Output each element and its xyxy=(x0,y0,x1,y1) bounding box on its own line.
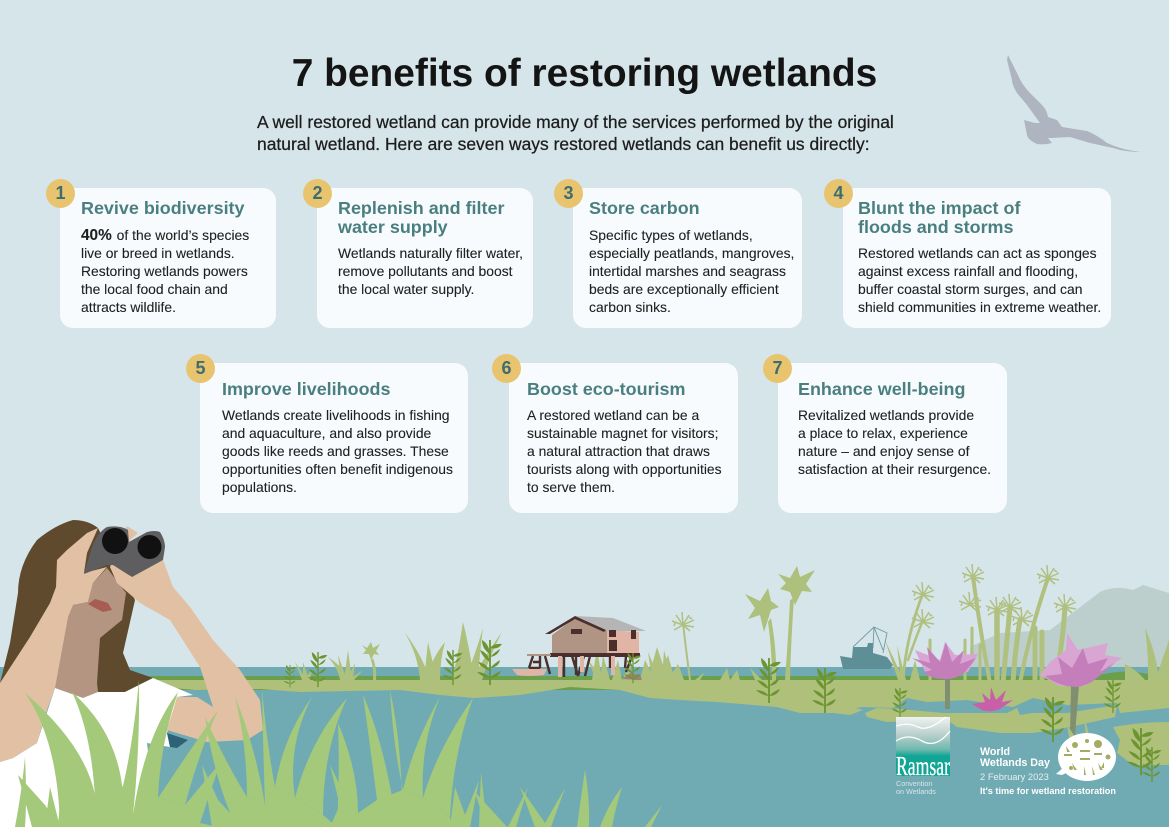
icon: flying bird xyxy=(1007,55,1141,152)
far arm and hand xyxy=(0,528,107,762)
text 1: the local food chain and xyxy=(81,281,228,297)
logo: World Wetlands Day: Wetlands Day xyxy=(980,757,1050,769)
badge 6 xyxy=(492,354,521,383)
lips xyxy=(88,599,112,612)
text 5: Wetlands create livelihoods in fishing xyxy=(222,407,450,423)
badge 2 xyxy=(303,179,332,208)
badge 3: 3 xyxy=(563,183,574,203)
text 3: Specific types of wetlands, xyxy=(589,227,753,243)
logo: World Wetlands Day xyxy=(980,733,1116,797)
text 4: Restored wetlands can act as sponges xyxy=(858,245,1097,261)
heading 4: floods and storms xyxy=(858,217,1013,237)
watch strap xyxy=(167,733,188,748)
heading 3: Store carbon xyxy=(589,198,700,218)
small reeds below right flower xyxy=(1067,716,1090,742)
badge 5 xyxy=(186,354,215,383)
logo: Ramsar Convention on Wetlands xyxy=(896,716,950,796)
badge 4: 4 xyxy=(833,183,844,203)
shore grass clumps xyxy=(295,622,1169,686)
distant shore strip xyxy=(130,672,1169,690)
text 7: Revitalized wetlands provide xyxy=(798,407,974,423)
text 6: to serve them. xyxy=(527,479,615,495)
logo: World Wetlands Day: It's time for wetland restoration xyxy=(980,786,1116,797)
logo: World Wetlands Day: 2 February 2023 xyxy=(980,771,1049,782)
heading 7: Enhance well-being xyxy=(798,379,965,399)
text 6: a natural attraction that draws xyxy=(527,443,710,459)
text 3: beds are exceptionally efficient xyxy=(589,281,779,297)
text 6: sustainable magnet for visitors; xyxy=(527,425,718,441)
neck and face xyxy=(55,568,126,698)
badge 1: 1 xyxy=(55,183,66,203)
small green plants xyxy=(284,640,1161,782)
binoculars xyxy=(84,526,165,577)
panel: card 5 livelihoods xyxy=(200,363,468,513)
text 6 xyxy=(527,407,722,495)
text 3 xyxy=(589,227,794,315)
text 1: live or breed in wetlands. xyxy=(81,245,235,261)
heading 5: Improve livelihoods xyxy=(222,379,390,399)
badge 3 xyxy=(554,179,583,208)
text 7: a place to relax, experience xyxy=(798,425,968,441)
badge 7: 7 xyxy=(772,358,782,378)
badge 7 xyxy=(763,354,792,383)
white shirt xyxy=(0,678,193,827)
text 5: populations. xyxy=(222,479,297,495)
text 3: intertidal marshes and seagrass xyxy=(589,263,786,279)
text 7: satisfaction at their resurgence. xyxy=(798,461,991,477)
lotus flower small xyxy=(972,687,1013,711)
distant water xyxy=(0,667,1169,827)
text 4: shield communities in extreme weather. xyxy=(858,299,1101,315)
text 2: the local water supply. xyxy=(338,281,474,297)
text 7: nature – and enjoy sense of xyxy=(798,443,969,459)
palm trees xyxy=(362,566,815,680)
badge 6: 6 xyxy=(501,358,512,378)
lotus flower left xyxy=(912,642,978,709)
text 1: Restoring wetlands powers xyxy=(81,263,248,279)
heading 4: Blunt the impact of xyxy=(858,198,1020,218)
text 2 xyxy=(338,245,523,297)
intro text: natural wetland. Here are seven ways restored wetlands can benefit us directly: xyxy=(257,134,870,154)
text 6: A restored wetland can be a xyxy=(527,407,699,423)
papyrus reeds xyxy=(672,564,1076,683)
text 4 xyxy=(858,245,1101,315)
logo: Ramsar Convention on Wetlands: Convention xyxy=(896,779,932,788)
lotus flower right xyxy=(1040,633,1122,735)
stilt house xyxy=(512,616,646,680)
logo: World Wetlands Day: World xyxy=(980,746,1010,758)
foreground grass xyxy=(15,680,662,827)
text 6: tourists along with opportunities xyxy=(527,461,722,477)
panel: card 7 well-being xyxy=(778,363,1007,513)
panel: card 3 store carbon xyxy=(573,188,802,328)
text 1: 40% of the world’s species xyxy=(81,227,249,244)
text 4: buffer coastal storm surges, and can xyxy=(858,281,1082,297)
text 5: opportunities often benefit indigenous xyxy=(222,461,453,477)
text 2: remove pollutants and boost xyxy=(338,263,513,279)
heading 4 xyxy=(858,198,1020,237)
text 1 xyxy=(81,227,249,315)
intro text xyxy=(256,112,894,154)
intro text: A well restored wetland can provide many of the services performed by the original xyxy=(257,112,894,132)
foreground land xyxy=(130,680,1169,713)
fishing boat xyxy=(840,627,893,669)
heading 2: Replenish and filter xyxy=(338,198,504,218)
person with binoculars xyxy=(0,520,263,827)
text 5 xyxy=(222,407,453,495)
near arm and hand xyxy=(110,526,263,742)
text 3: carbon sinks. xyxy=(589,299,671,315)
title: 7 benefits of restoring wetlands xyxy=(292,52,877,95)
panel: card 1 revive biodiversity xyxy=(60,188,276,328)
badge 5: 5 xyxy=(195,358,206,378)
panel: card 4 blunt floods xyxy=(843,188,1111,328)
text 1: attracts wildlife. xyxy=(81,299,176,315)
panel: card 2 replenish water xyxy=(317,188,533,328)
text 4: against excess rainfall and flooding, xyxy=(858,263,1078,279)
text 3: especially peatlands, mangroves, xyxy=(589,245,794,261)
text 5: goods like reeds and grasses. These xyxy=(222,443,449,459)
text 2: Wetlands naturally filter water, xyxy=(338,245,523,261)
heading 1: Revive biodiversity xyxy=(81,198,245,218)
heading 2 xyxy=(338,198,504,237)
panel: card 6 eco-tourism xyxy=(509,363,738,513)
hair xyxy=(0,520,153,692)
mountain xyxy=(970,585,1169,668)
badge 2: 2 xyxy=(312,183,322,203)
logo: Ramsar Convention on Wetlands: on Wetlands xyxy=(896,787,936,796)
text 7 xyxy=(798,407,991,477)
badge 4 xyxy=(824,179,853,208)
badge 1 xyxy=(46,179,75,208)
heading 2: water supply xyxy=(338,217,448,237)
heading 6: Boost eco-tourism xyxy=(527,379,685,399)
text 5: and aquaculture, and also provide xyxy=(222,425,431,441)
islands xyxy=(830,705,1169,765)
